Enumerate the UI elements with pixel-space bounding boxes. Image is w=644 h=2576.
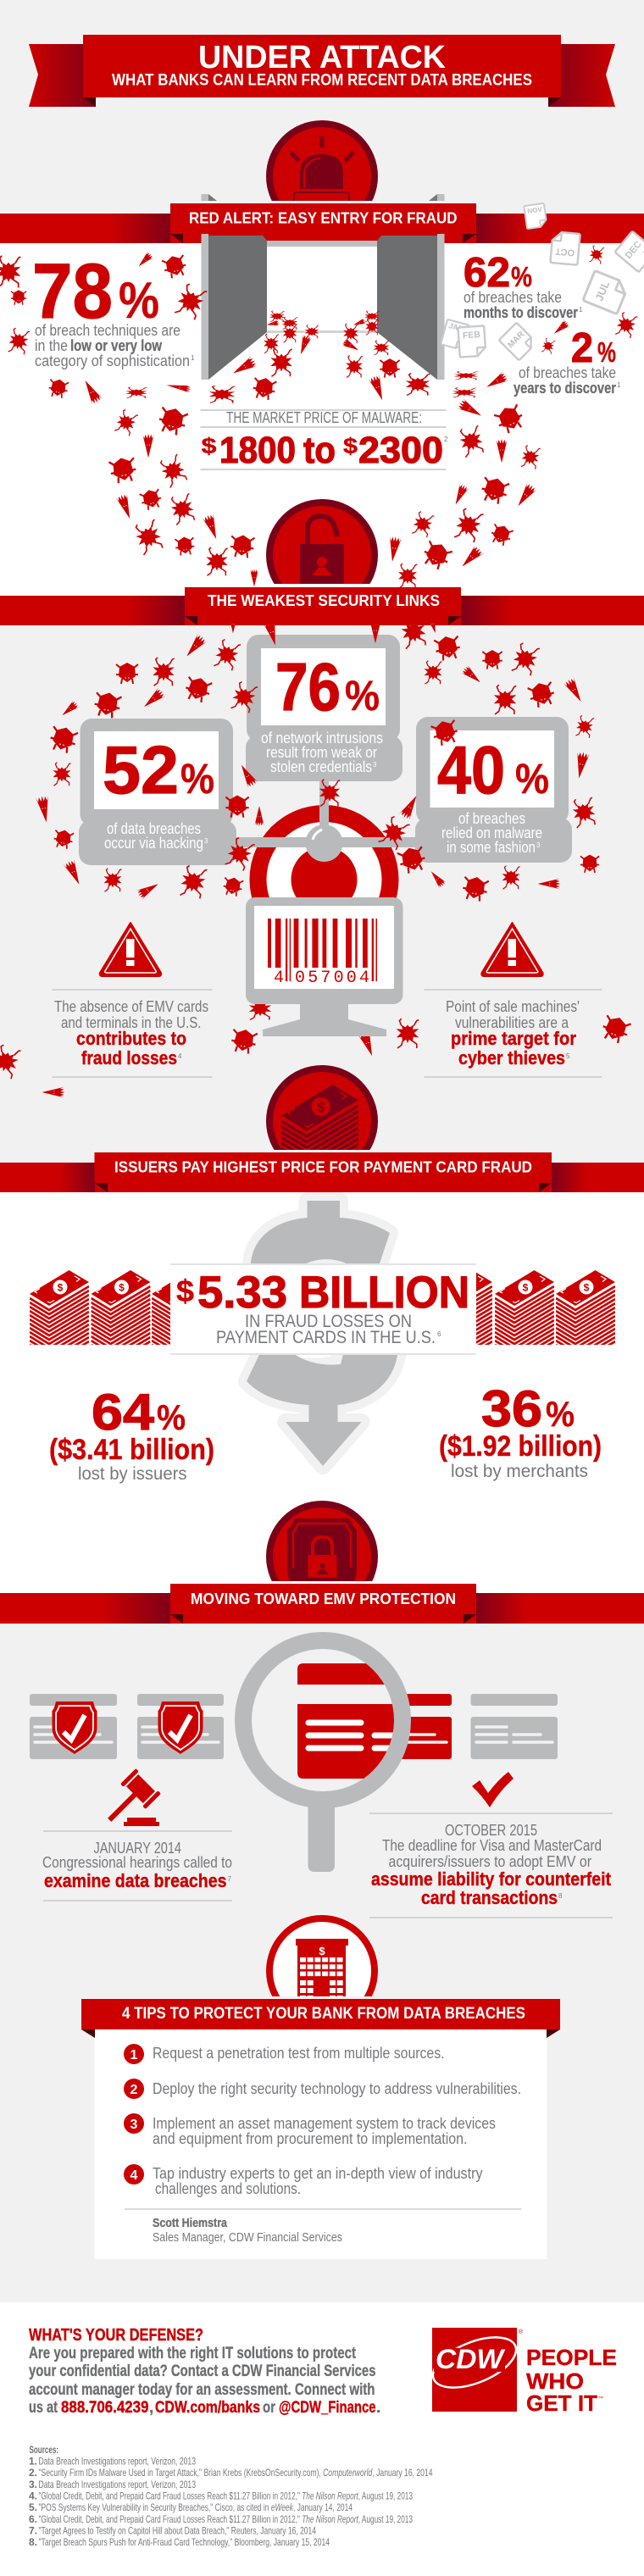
icon: open padlock	[266, 499, 378, 611]
doorway illustration	[202, 194, 444, 380]
sources: 6.	[29, 2513, 37, 2525]
text: January 2014: 7	[227, 1875, 232, 1883]
text: October 2015: The deadline for Visa and MasterCard	[382, 1837, 602, 1854]
tip 4: challenges and solutions.	[155, 2180, 301, 2197]
section band: issuers pay	[0, 1163, 644, 1192]
icon: gavel	[97, 1768, 161, 1833]
card 3 red	[398, 1694, 452, 1759]
banner: EMV protection: MOVING TOWARD EMV PROTECTION	[191, 1591, 456, 1607]
tip 1: Request a penetration test from multiple sources.	[153, 2045, 444, 2062]
market price of malware: 1800	[219, 430, 296, 471]
panel: 76 percent: 3	[373, 761, 377, 769]
market price of malware: $	[202, 433, 217, 458]
stat: lost by merchants: 36	[481, 1380, 542, 1437]
warning callout: point of sale: prime target for	[451, 1028, 576, 1049]
sources: 2.	[29, 2467, 37, 2479]
text: January 2014	[42, 1830, 232, 1901]
stat: 62 percent: months to discover	[464, 304, 578, 321]
text: October 2015	[369, 1813, 613, 1918]
icon: check mark	[472, 1772, 514, 1807]
title text: UNDER ATTACK	[198, 40, 447, 75]
market price of malware: 2300	[358, 430, 443, 471]
monitor with barcode: 057004	[295, 969, 369, 988]
sources: Sources:	[29, 2444, 58, 2456]
card 4	[471, 1694, 558, 1759]
tip 3: and equipment from procurement to implementation.	[153, 2130, 468, 2147]
warning callout: EMV absence: and terminals in the U.S.	[61, 1014, 202, 1031]
section band: weakest links	[0, 596, 644, 625]
banner: weakest links	[185, 587, 461, 625]
author: Scott Hiemstra	[153, 2216, 228, 2230]
warning callout: point of sale: cyber thieves	[458, 1047, 565, 1069]
panel: 76 percent: 76	[275, 649, 341, 724]
banner: 4 tips	[81, 1999, 560, 2038]
warning callout: EMV absence	[53, 923, 212, 1078]
calendar documents: NOV	[527, 206, 543, 215]
text: January 2014: JANUARY 2014	[93, 1840, 181, 1857]
calendar documents	[441, 203, 644, 360]
sources: 7.	[29, 2525, 37, 2537]
swarm of malware bugs	[0, 245, 638, 1097]
warning callout: EMV absence: fraud losses	[81, 1047, 177, 1069]
banner: 4 tips: 4 TIPS TO PROTECT YOUR BANK FROM DATA BREACHES	[122, 2005, 525, 2023]
panel: 40 percent: in some fashion	[447, 839, 536, 856]
stat: 78 percent: low or very low	[70, 337, 163, 354]
warning callout: point of sale: vulnerabilities are a	[455, 1014, 569, 1031]
stat: 78 percent: category of sophistication	[35, 353, 190, 369]
panel: 52 percent: 3	[204, 837, 208, 845]
banner: issuers pay: ISSUERS PAY HIGHEST PRICE FOR PAYMENT CARD FRAUD	[114, 1159, 532, 1176]
icon: stack of money	[266, 1065, 378, 1213]
CDW logo: PEOPLE	[526, 2345, 617, 2370]
panel: 40 percent	[415, 717, 572, 863]
call to action: 888.706.4239	[61, 2399, 149, 2417]
stat: 2 percent: %	[597, 336, 616, 368]
tip 3: Implement an asset management system to track devices	[153, 2115, 496, 2132]
sources: 1.	[29, 2456, 37, 2468]
banner: issuers pay	[95, 1152, 552, 1192]
title ribbon	[29, 35, 615, 107]
stat: 78 percent	[32, 248, 195, 369]
stacks of money	[30, 1270, 615, 1369]
text: October 2015: assume liability for counterfeit	[371, 1868, 612, 1890]
text: January 2014: Congressional hearings called to	[42, 1854, 232, 1871]
call to action: ,	[149, 2399, 153, 2417]
sources	[29, 2444, 433, 2548]
card 2 with shield	[137, 1694, 224, 1759]
stat: lost by merchants: lost by merchants	[451, 1462, 588, 1481]
subtitle: WHAT BANKS CAN LEARN FROM RECENT DATA BREACHES	[112, 71, 532, 90]
stat: 62 percent	[464, 250, 583, 321]
icon: bank building: $	[319, 1945, 325, 1957]
calendar documents: JAN	[447, 321, 464, 334]
calendar documents: FEB	[463, 330, 481, 341]
market price of malware: 2	[444, 436, 448, 443]
sources: 3.	[29, 2479, 37, 2490]
author: Sales Manager, CDW Financial Services	[153, 2230, 342, 2245]
panel: 40 percent: %	[515, 755, 549, 802]
sources: "POS Systems Key Vulnerability in Security Breaches," Cisco, as cited in eWeek, January 14, 2014	[39, 2501, 353, 2513]
calendar documents: DEC	[624, 239, 644, 261]
panel: 4 tips	[95, 2029, 547, 2259]
market price of malware: to	[303, 430, 336, 471]
panel: 52 percent: %	[180, 755, 214, 802]
warning callout: point of sale: 5	[566, 1052, 570, 1060]
warning callout: EMV absence: The absence of EMV cards	[54, 998, 208, 1015]
stat: lost by merchants	[439, 1380, 602, 1481]
sources: "Global Credit, Debit, and Prepaid Card Fraud Losses Reach $11.27 Billion in 2012," The Nilson Report, August 19, 2013	[39, 2513, 413, 2525]
author	[153, 2216, 342, 2245]
call to action: Are you prepared with the right IT solutions to protect	[29, 2345, 357, 2362]
panel: total fraud losses: $	[176, 1274, 194, 1308]
tip 4	[124, 2164, 483, 2197]
CDW logo	[426, 2327, 617, 2416]
warning callout: EMV absence: contributes to	[76, 1028, 186, 1049]
stat: 2 percent: 1	[617, 381, 621, 389]
stat: lost by issuers: ($3.41 billion)	[49, 1434, 214, 1466]
call to action: WHAT'S YOUR DEFENSE?	[29, 2326, 203, 2345]
stat: lost by issuers: %	[157, 1397, 186, 1437]
panel: 52 percent: occur via hacking	[104, 835, 203, 852]
calendar documents: JUL	[592, 279, 612, 303]
sources: Data Breach Investigations report, Verizon, 2013	[39, 2479, 196, 2490]
panel: total fraud losses: BILLION	[299, 1268, 469, 1318]
stat: 78 percent: 1	[191, 354, 195, 362]
warning callout: point of sale	[424, 923, 602, 1078]
banner: EMV protection	[170, 1584, 476, 1624]
CDW logo: WHO	[526, 2368, 584, 2394]
sources: 8.	[29, 2536, 37, 2548]
sources: "Global Credit, Debit, and Prepaid Card Fraud Losses Reach $11.27 Billion in 2012," The Nilson Report, August 19, 2013	[39, 2490, 413, 2501]
panel: total fraud losses: 5.33	[197, 1268, 287, 1318]
stat: lost by merchants: ($1.92 billion)	[439, 1430, 602, 1463]
panel: 52 percent	[79, 719, 236, 865]
warning callout: EMV absence: 4	[178, 1052, 182, 1060]
section band: EMV protection	[0, 1593, 644, 1624]
stat: 78 percent: in the	[35, 337, 68, 354]
stat: 62 percent: of breaches take	[464, 289, 562, 306]
stat: 2 percent: of breaches take	[519, 364, 616, 381]
panel: total fraud losses: PAYMENT CARDS IN THE U.S.	[216, 1328, 436, 1347]
panel: 76 percent: result from weak or	[266, 744, 377, 761]
call to action: CDW.com/banks	[155, 2399, 260, 2417]
stat: lost by merchants: %	[546, 1394, 575, 1434]
panel: 76 percent: of network intrusions	[261, 730, 383, 747]
stat: 78 percent: %	[119, 272, 159, 329]
panel: 40 percent: 40	[437, 732, 505, 808]
stat: 62 percent: 1	[579, 306, 583, 314]
panel: 76 percent	[246, 635, 402, 781]
stat: 2 percent	[514, 325, 621, 397]
CDW logo: ®	[519, 2329, 524, 2335]
panel: 40 percent: of breaches	[458, 810, 525, 827]
market price of malware: THE MARKET PRICE OF MALWARE:	[226, 409, 422, 426]
market price of malware: $	[343, 433, 358, 458]
tip 2: Deploy the right security technology to address vulnerabilities.	[153, 2080, 521, 2097]
text: October 2015: acquirers/issuers to adopt EMV or	[388, 1853, 591, 1870]
panel: 40 percent: 3	[536, 841, 541, 849]
calendar documents: MAR	[506, 330, 526, 350]
call to action: @CDW_Finance	[279, 2399, 376, 2417]
panel: total fraud losses: IN FRAUD LOSSES ON	[245, 1312, 412, 1331]
big dollar sign with arrow	[247, 1201, 398, 1466]
sources: "Target Agrees to Testify on Capitol Hill about Data Breach," Reuters, January 16, 2014	[39, 2525, 316, 2537]
panel: 76 percent: %	[345, 672, 380, 719]
panel: 40 percent: relied on malware	[441, 824, 542, 841]
tip 4: Tap industry experts to get an in-depth view of industry	[153, 2165, 483, 2182]
banner: weakest links: THE WEAKEST SECURITY LINKS	[208, 592, 440, 609]
stat: lost by issuers: lost by issuers	[78, 1464, 186, 1484]
call to action: us at	[29, 2399, 58, 2417]
call to action	[29, 2326, 380, 2417]
text: October 2015: OCTOBER 2015	[445, 1822, 537, 1839]
cards row	[30, 1694, 558, 1759]
text: October 2015: card transactions	[421, 1887, 558, 1908]
warning callout: point of sale: Point of sale machines'	[446, 998, 580, 1015]
text: October 2015: 8	[558, 1892, 563, 1900]
sources: Data Breach Investigations report, Verizon, 2013	[39, 2456, 196, 2468]
banner: red alert	[170, 203, 476, 243]
icon: shield with padlock	[266, 1501, 378, 1613]
call to action: .	[376, 2399, 380, 2417]
card 1 with shield	[30, 1694, 117, 1759]
monitor with barcode	[246, 897, 403, 1036]
panel: total fraud losses: 6	[437, 1330, 441, 1338]
tip 3	[124, 2113, 496, 2147]
magnifying glass over card	[243, 1641, 407, 1872]
stat: 2 percent: years to discover	[514, 380, 616, 397]
sources: 5.	[29, 2501, 37, 2513]
target with crosshair	[236, 781, 415, 954]
call to action: your confidential data? Contact a CDW Financial Services	[29, 2362, 376, 2380]
stat: 78 percent: of breach techniques are	[35, 322, 180, 339]
CDW logo: CDW	[436, 2344, 506, 2374]
panel: total fraud losses	[170, 1263, 476, 1355]
stat: 78 percent: 78	[32, 248, 113, 335]
stat: lost by issuers: 64	[92, 1384, 155, 1441]
tip 3: 3	[130, 2118, 138, 2132]
icon: bank building	[269, 1918, 375, 2024]
text: January 2014: examine data breaches	[44, 1870, 227, 1891]
stat: 2 percent: 2	[571, 325, 593, 371]
tip 2: 2	[130, 2083, 138, 2097]
section band: red alert	[0, 214, 644, 243]
icon: siren	[266, 120, 378, 232]
panel: 76 percent: stolen credentials	[270, 758, 372, 775]
market price of malware	[200, 409, 448, 471]
panel: 52 percent: 52	[103, 732, 179, 808]
call to action: account manager today for an assessment. Connect with	[29, 2381, 375, 2399]
call to action: or	[263, 2399, 275, 2417]
stat: lost by issuers	[49, 1384, 214, 1484]
sources: "Target Breach Spurs Push for Anti-Fraud Card Technology," Bloomberg, January 15, 2014	[39, 2536, 330, 2548]
panel: 52 percent: of data breaches	[107, 820, 201, 837]
CDW logo: ™	[598, 2396, 603, 2401]
monitor with barcode: 4	[274, 969, 284, 988]
stat: 62 percent: %	[511, 261, 532, 292]
calendar documents: OCT	[554, 246, 575, 258]
stat: 62 percent: 62	[464, 250, 510, 296]
CDW logo: GET IT	[526, 2390, 597, 2416]
sources: "Security Firm IDs Malware Used in Target Attack," Brian Krebs (KrebsOnSecurity.com), Computerworld, January 16, 2014	[39, 2467, 433, 2479]
banner: red alert: RED ALERT: EASY ENTRY FOR FRAUD	[189, 210, 458, 227]
tip 1: 1	[130, 2048, 138, 2062]
tip 1	[124, 2044, 444, 2064]
tip 4: 4	[130, 2168, 138, 2183]
sources: 4.	[29, 2490, 37, 2501]
